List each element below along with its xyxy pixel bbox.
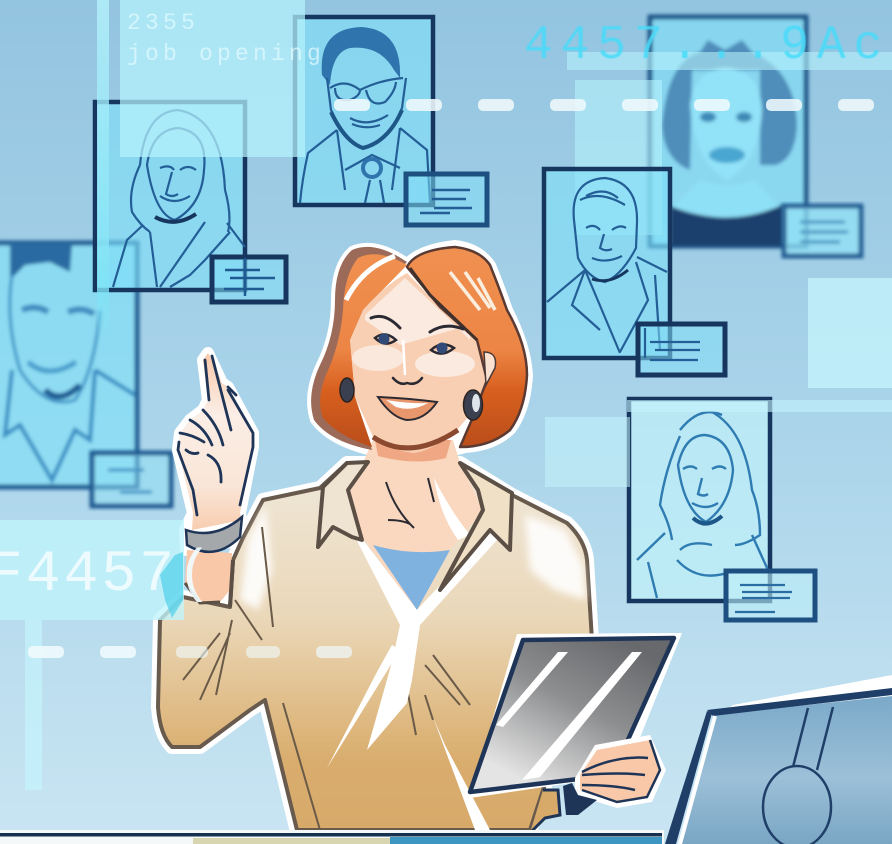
neck and chest [350, 440, 483, 612]
mouth [378, 397, 437, 420]
white halo around body [158, 463, 592, 832]
neck lines and highlight [386, 478, 434, 528]
eyes, nose, mouth [371, 316, 463, 384]
woman figure [158, 244, 592, 832]
white halo around hair [311, 244, 529, 456]
screen text: job count [127, 10, 325, 67]
screen text: job count: 2355 [127, 10, 199, 36]
white shirt opening [327, 530, 497, 830]
hand lines [178, 356, 253, 515]
hair: left side [320, 254, 407, 447]
card: man with glasses [406, 174, 487, 225]
dashed line: lower [28, 646, 352, 658]
hair part line [410, 268, 477, 340]
portrait: blurred woman, top right [650, 17, 806, 246]
hair streaks [450, 272, 495, 310]
card: blurred woman [784, 206, 861, 256]
hair: outer brown edge [311, 247, 407, 450]
card: woman top left [212, 257, 286, 302]
screen text: job count: job opening [127, 41, 325, 67]
tablet [470, 633, 682, 798]
card: man in jacket [638, 324, 725, 375]
portrait: man with glasses [295, 17, 433, 205]
hand holding tablet [530, 735, 666, 833]
face [350, 273, 487, 453]
laptop [665, 675, 892, 844]
shirt shoulder highlights [240, 505, 586, 610]
hair: left highlight [346, 256, 395, 300]
shirt [158, 463, 592, 830]
desk edge [0, 830, 664, 844]
watch [186, 517, 242, 552]
screen text: top right code: 4457...9Ac [524, 19, 890, 73]
forehead and cheek highlights [352, 278, 475, 377]
undershirt [373, 545, 450, 610]
portrait: man in jacket [544, 169, 670, 358]
portrait: woman with long hair [629, 399, 770, 601]
raised hand [178, 353, 253, 530]
hair: right side [407, 247, 527, 447]
earrings [340, 378, 354, 402]
forearm [185, 550, 232, 603]
ear [484, 352, 496, 385]
dashed line: top [334, 99, 874, 111]
portrait: blurred man, left [0, 243, 137, 487]
card: woman with long hair [726, 571, 815, 620]
shirt folds [183, 527, 470, 830]
bottom-left screen panel with code [0, 520, 215, 620]
neck shadow [375, 440, 451, 462]
collar [318, 462, 368, 547]
card: blurred man [92, 453, 171, 506]
chin line [373, 430, 458, 448]
portrait: woman, top left [95, 102, 245, 290]
white halo around hand [178, 353, 253, 550]
